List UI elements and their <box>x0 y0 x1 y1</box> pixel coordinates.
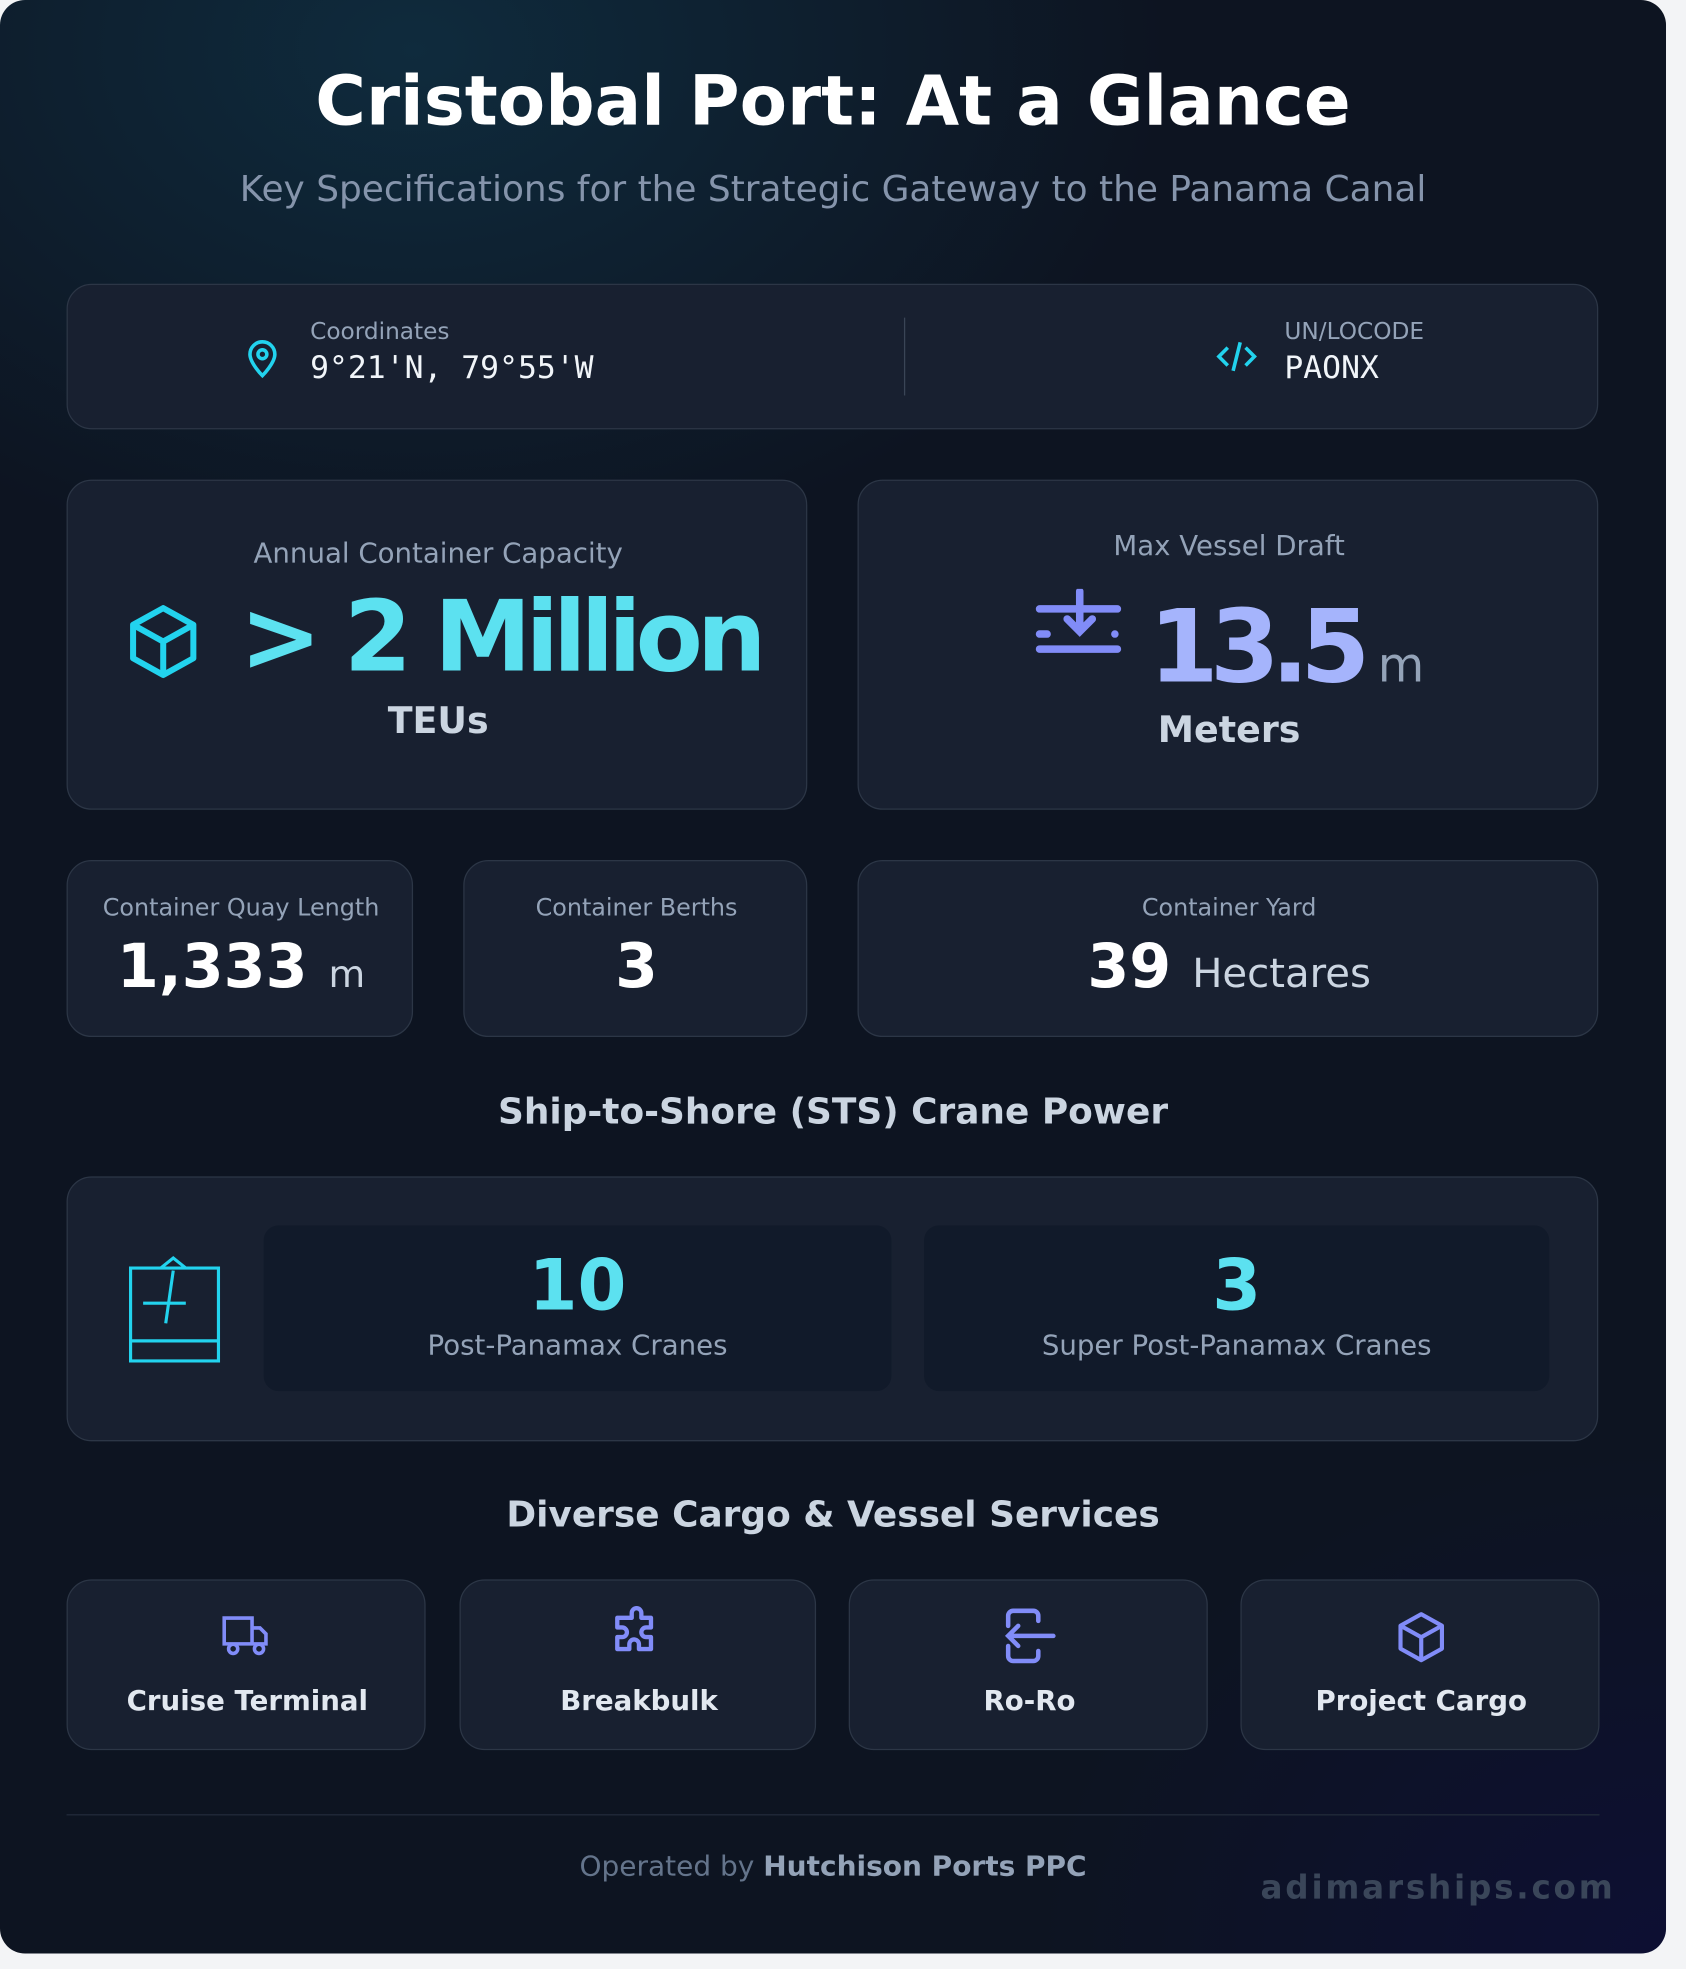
panel: annual capacity <box>67 480 807 810</box>
icon: map pin <box>248 340 277 378</box>
panel: max draft: Meters <box>1158 708 1300 751</box>
panel: yard <box>858 860 1598 1037</box>
panel: yard: 39 Hectares <box>1087 932 1371 1002</box>
service: project cargo <box>1240 1579 1600 1750</box>
panel: berths: 3 <box>615 930 658 1002</box>
panel: quay length: Container Quay Length <box>103 894 379 922</box>
panel: quay length: 1,333 m <box>117 932 365 1002</box>
heading: crane: Ship-to-Shore (STS) Crane Power <box>498 1090 1168 1132</box>
service: project cargo: Project Cargo <box>1315 1686 1527 1718</box>
crane stat: super post-panamax: Super Post-Panamax Cranes <box>1042 1331 1431 1362</box>
panel: max draft: 13.5 m <box>1149 589 1424 706</box>
panel: max draft <box>858 480 1598 810</box>
title: Cristobal Port: At a Glance <box>315 60 1351 141</box>
panel: annual capacity: Annual Container Capacity <box>254 539 623 570</box>
service: cruise <box>67 1579 426 1750</box>
UN/LOCODE <box>1284 319 1424 385</box>
panel: crane <box>67 1176 1598 1441</box>
panel: quay length <box>67 860 413 1037</box>
panel: annual capacity: TEUs <box>388 699 489 742</box>
coordinates: 9°21'N, 79°55'W <box>310 349 594 385</box>
panel: berths <box>463 860 807 1037</box>
service: ro-ro: Ro-Ro <box>984 1686 1075 1718</box>
service: breakbulk <box>460 1579 816 1750</box>
service: cruise: Cruise Terminal <box>127 1686 368 1718</box>
footer: Operated by Hutchison Ports PPC <box>579 1851 1087 1883</box>
UN/LOCODE: UN/LOCODE <box>1284 319 1424 345</box>
panel: max draft: Max Vessel Draft <box>1113 531 1345 562</box>
icon: crane <box>129 1256 220 1362</box>
panel: info bar <box>67 284 1598 429</box>
service: breakbulk: Breakbulk <box>560 1686 718 1718</box>
subtitle: Key Specifications for the Strategic Gateway to the Panama Canal <box>240 167 1426 210</box>
icon: cube <box>130 605 196 678</box>
UN/LOCODE: PAONX <box>1284 349 1379 385</box>
watermark: adimarships.com <box>1261 1869 1616 1907</box>
panel: berths: Container Berths <box>536 894 737 922</box>
crane stat: super post-panamax: 3 <box>1212 1245 1261 1327</box>
panel: annual capacity: > 2 Million <box>240 581 761 694</box>
crane stat: super post-panamax <box>924 1225 1549 1391</box>
crane stat: post-panamax: Post-Panamax Cranes <box>428 1331 728 1362</box>
crane stat: post-panamax: 10 <box>529 1245 626 1327</box>
coordinates <box>310 319 594 385</box>
coordinates: Coordinates <box>310 319 450 345</box>
heading: services: Diverse Cargo & Vessel Services <box>506 1493 1160 1535</box>
service: ro-ro <box>849 1579 1208 1750</box>
panel: yard: Container Yard <box>1142 894 1316 922</box>
icon: code <box>1216 342 1257 372</box>
icon: draft <box>1036 588 1122 653</box>
crane stat: post-panamax <box>264 1225 891 1391</box>
